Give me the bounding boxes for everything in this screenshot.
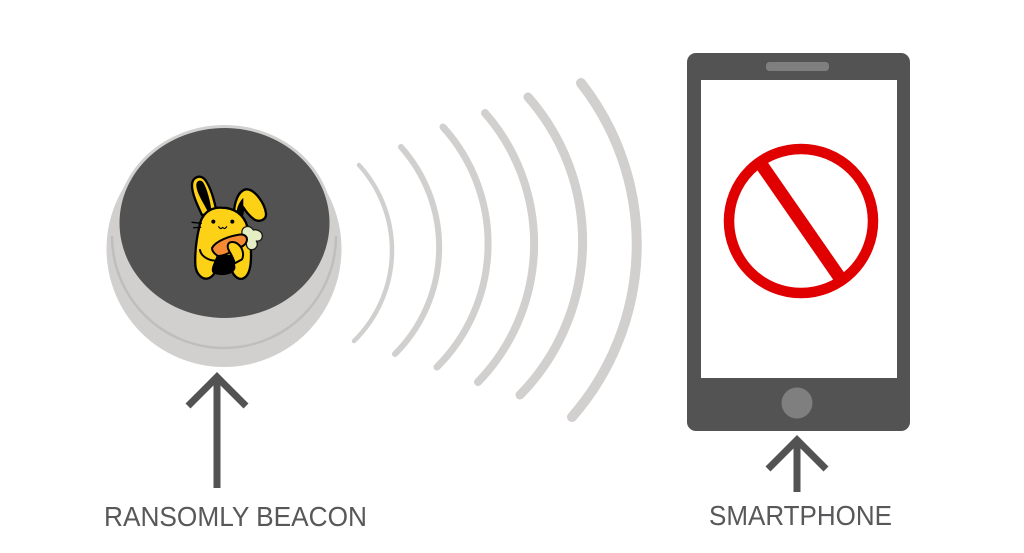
signal waves xyxy=(354,83,637,417)
beacon device xyxy=(106,125,342,367)
phone screen xyxy=(701,80,897,378)
arrow: to beacon xyxy=(188,377,246,488)
wave 6 xyxy=(572,83,637,417)
label: ransomly beacon: RANSOMLY BEACON xyxy=(104,501,367,532)
phone home button xyxy=(782,388,812,418)
wave 3 xyxy=(437,127,488,367)
icon: rabbit belly xyxy=(212,255,235,275)
icon: carrot leaves xyxy=(242,226,262,250)
icon: prohibition sign xyxy=(729,149,873,293)
icon: rabbit left ear xyxy=(192,177,217,215)
wave 1 xyxy=(354,165,392,341)
icon: yellow rabbit holding carrot xyxy=(192,177,266,279)
icon: rabbit body xyxy=(195,208,251,279)
icon: rabbit hand xyxy=(228,242,243,263)
icon: rabbit right ear xyxy=(234,189,266,221)
icon: carrot xyxy=(212,235,247,256)
arrow: to smartphone xyxy=(768,440,826,492)
icon: rabbit eyes xyxy=(211,220,234,224)
smartphone xyxy=(687,53,910,431)
icon: rabbit left arm line xyxy=(200,250,216,261)
wave 4 xyxy=(478,113,534,382)
wave 5 xyxy=(520,97,583,395)
label: smartphone: SMARTPHONE xyxy=(709,500,892,531)
icon: rabbit whiskers xyxy=(192,222,201,228)
wave 2 xyxy=(395,147,439,354)
phone speaker xyxy=(766,62,829,71)
icon: rabbit mouth xyxy=(219,227,227,229)
